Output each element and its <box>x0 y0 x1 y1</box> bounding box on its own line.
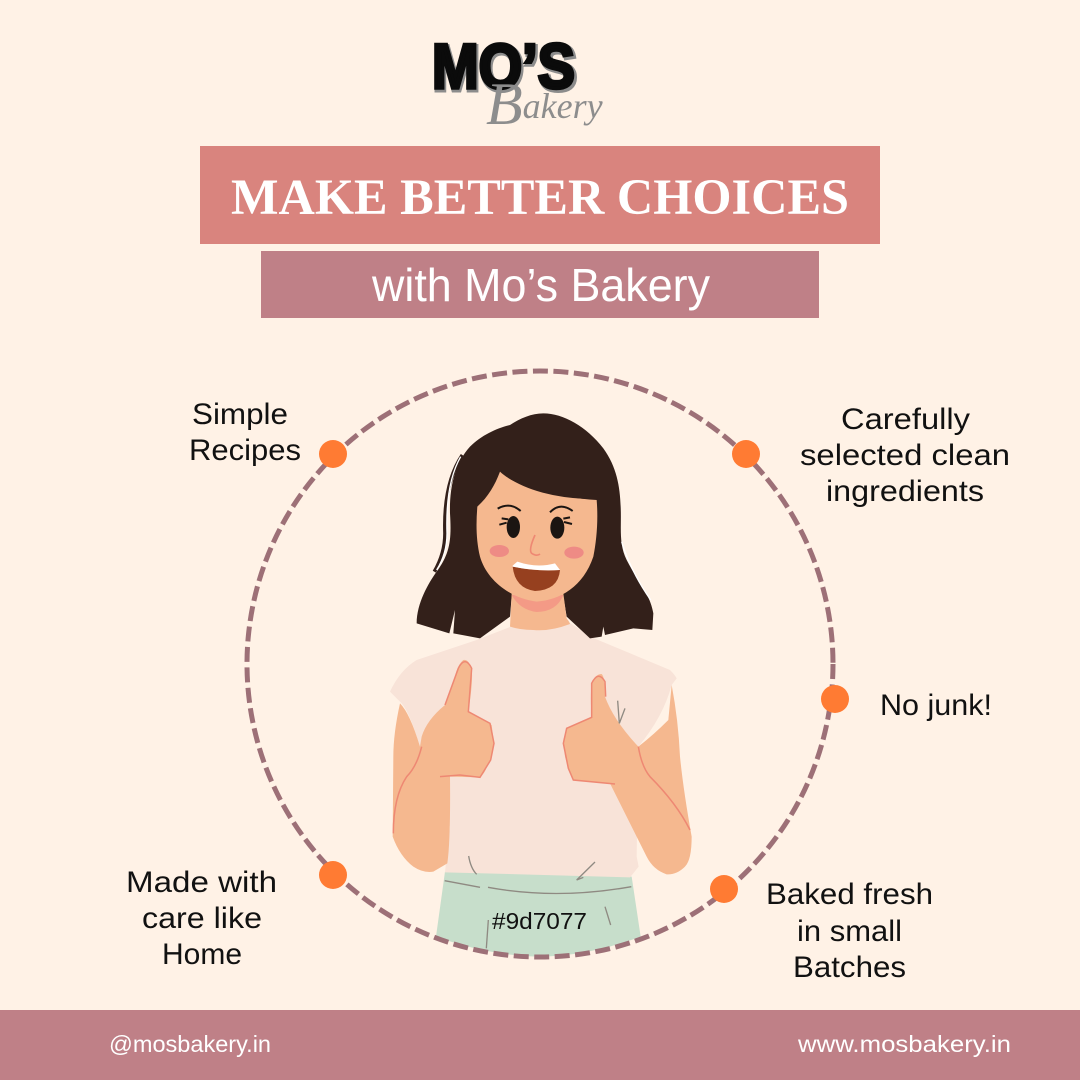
label: baked fresh: Batches <box>793 951 906 984</box>
label: clean ingredients <box>800 403 1010 508</box>
title banner <box>200 146 880 244</box>
label: baked fresh <box>766 878 933 984</box>
right arm and hand <box>563 674 692 874</box>
eyes and brows <box>498 506 573 539</box>
footer <box>0 1010 1080 1080</box>
hair highlights <box>434 455 651 600</box>
hair <box>417 413 653 638</box>
clothing creases <box>445 701 631 948</box>
label: clean ingredients: selected clean <box>800 439 1010 472</box>
footer: @mosbakery.in <box>109 1031 271 1057</box>
logo <box>432 32 603 137</box>
left arm and hand <box>393 660 494 872</box>
fringe line <box>506 475 587 498</box>
hand outlines <box>393 662 690 833</box>
label: simple recipes: Recipes <box>189 434 301 467</box>
trousers <box>436 872 641 957</box>
footer: www.mosbakery.in <box>797 1031 1011 1057</box>
blush <box>490 545 584 559</box>
shirt <box>390 623 677 877</box>
logo: MO’S <box>433 34 577 104</box>
dashed circle <box>247 371 833 957</box>
neck <box>510 593 570 630</box>
logo: akery <box>523 86 603 126</box>
head group <box>417 413 653 638</box>
label: made with care <box>126 866 277 971</box>
label: simple recipes <box>189 398 301 467</box>
neck shadow <box>512 595 563 612</box>
label: baked fresh: Baked fresh <box>766 878 933 911</box>
label: no junk: No junk! <box>880 689 992 722</box>
logo: B <box>486 71 523 137</box>
label: simple recipes: Simple <box>192 398 288 431</box>
face <box>477 472 597 602</box>
nose <box>531 535 540 555</box>
subtitle banner: with Mo’s Bakery <box>371 259 710 311</box>
subtitle banner <box>261 251 819 318</box>
logo: MO’S <box>432 32 575 102</box>
mouth <box>513 562 560 591</box>
title banner: MAKE BETTER CHOICES <box>231 170 849 226</box>
label: made with care: Made with <box>126 866 277 899</box>
marker dots <box>319 440 849 903</box>
label: clean ingredients: ingredients <box>826 475 984 508</box>
illustration: woman giving thumbs up <box>390 413 692 957</box>
label: made with care: Home <box>162 938 242 971</box>
label: baked fresh: in small <box>797 915 902 948</box>
body group <box>390 623 692 957</box>
label: made with care: care like <box>142 902 262 935</box>
colour code label: #9d7077 <box>492 908 587 934</box>
label: clean ingredients: Carefully <box>841 403 970 436</box>
